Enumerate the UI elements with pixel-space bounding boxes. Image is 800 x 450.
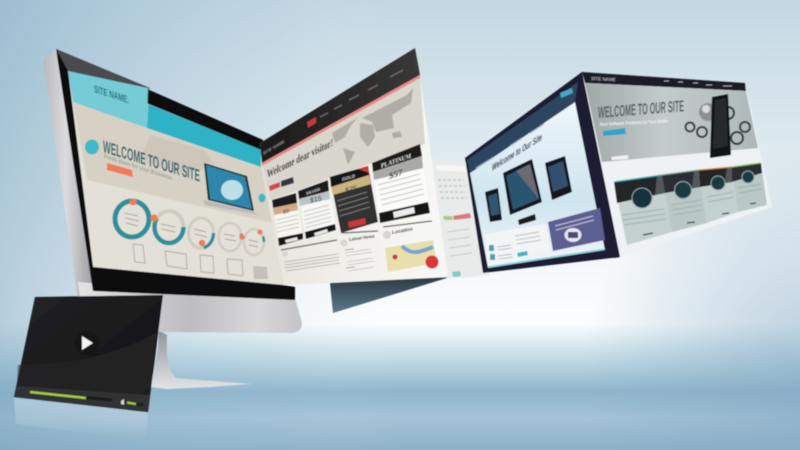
video controls	[14, 386, 150, 412]
feature columns	[614, 163, 767, 245]
location: Location	[392, 226, 413, 236]
pricing column 3	[330, 166, 378, 233]
latest news: Latest News	[349, 233, 375, 242]
world map	[332, 88, 413, 165]
cube right face	[578, 72, 772, 258]
monitor silver frame	[43, 49, 100, 300]
progress rings	[115, 201, 264, 255]
left face heading: Welcome to Our Site	[492, 132, 542, 174]
monitor stand	[150, 330, 252, 389]
back page panel	[430, 160, 490, 278]
hero button	[107, 163, 133, 177]
pricing column 2	[298, 180, 336, 239]
page heading: Welcome dear visitor!	[267, 135, 333, 181]
left face header	[467, 82, 578, 173]
page buttons	[269, 177, 294, 191]
location	[383, 226, 413, 239]
latest news	[340, 233, 375, 271]
right face hero	[585, 83, 758, 162]
cube right face: WELCOME TO OUR SITE	[598, 97, 684, 122]
pricing column 2: SILVER	[306, 187, 320, 196]
progress bar	[30, 392, 112, 400]
volume	[121, 399, 143, 405]
pricing column 3: $25	[345, 184, 357, 195]
middle page	[260, 48, 448, 285]
pricing column 1	[272, 193, 303, 246]
right face subtitle: Best Software Products for Your Better	[600, 118, 668, 128]
right face header	[582, 72, 746, 91]
purple panel	[548, 208, 605, 251]
right face button	[603, 128, 626, 136]
pricing column 4: $57	[389, 167, 403, 181]
hero badge	[85, 140, 99, 154]
tablet	[503, 159, 542, 215]
phone left	[485, 188, 502, 222]
location map	[385, 240, 438, 272]
header band	[147, 104, 261, 167]
cube left face	[465, 72, 620, 273]
laptop	[203, 163, 259, 215]
dark button	[518, 214, 536, 225]
page header	[260, 48, 420, 166]
monitor	[43, 49, 302, 389]
back panel shadow	[330, 277, 450, 313]
pricing column 2: $15	[310, 194, 322, 205]
pricing column 3: GOLD	[342, 173, 356, 182]
right face header: SITE NAME	[591, 76, 616, 82]
pricing column 1: $9	[283, 209, 289, 216]
device outlines	[133, 244, 243, 276]
gears and phone	[686, 94, 750, 158]
pricing column 4: PLATINUM	[381, 153, 412, 170]
hero subtitle: Fresh ideas for your Business	[104, 153, 172, 182]
monitor chin	[78, 282, 302, 333]
left face footer	[484, 224, 551, 264]
left face screen	[470, 102, 605, 268]
monitor screen	[68, 71, 283, 285]
play button	[75, 331, 99, 355]
about text	[282, 251, 340, 271]
monitor bezel	[56, 49, 295, 300]
video player	[14, 295, 163, 412]
monitor screen: WELCOME TO OUR SITE	[103, 136, 200, 186]
page header: SITE NAME	[263, 139, 285, 156]
video reflection	[14, 398, 148, 440]
phone right	[545, 156, 572, 200]
site name: SITE NAME.	[94, 84, 129, 106]
pricing column 4	[372, 144, 430, 223]
